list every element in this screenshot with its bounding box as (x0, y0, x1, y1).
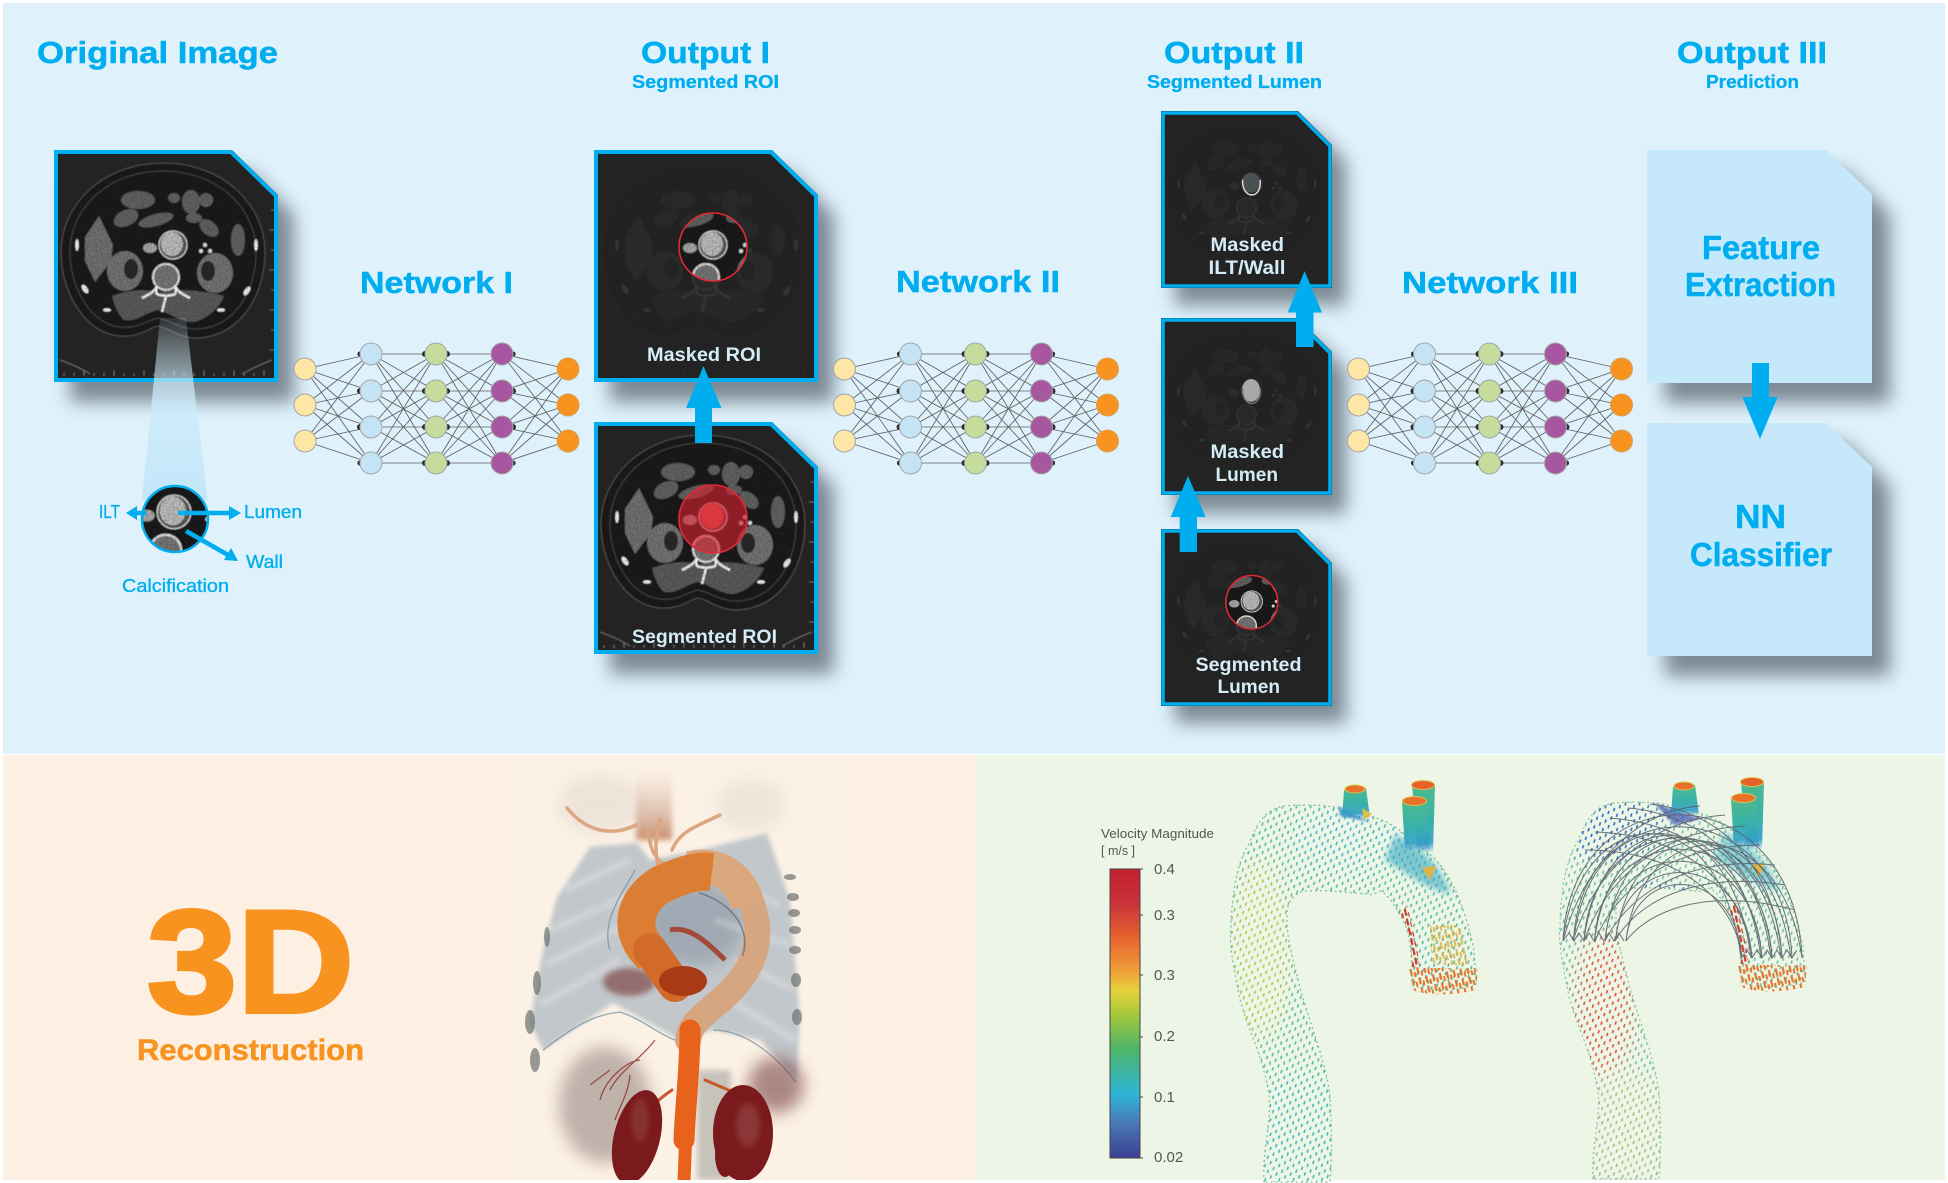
diagram: neural network III (1348, 343, 1632, 474)
card: masked ROI (594, 150, 834, 402)
box: feature extraction (1647, 150, 1890, 403)
heading: Output III: Output III (1677, 35, 1827, 70)
box: feature extraction: Extraction (1685, 266, 1836, 303)
heading: Output I: Segmented ROI (632, 72, 779, 92)
heading: Original Image: Original Image (37, 35, 278, 70)
callout: aorta detail circle with labelled arrows: Wall (246, 552, 283, 572)
heading: Output III (1677, 35, 1827, 92)
card: segmented lumen: Lumen (1218, 677, 1280, 698)
chart: velocity magnitude colour legend: Velocity Magnitude (1101, 826, 1214, 841)
box: NN classifier (1647, 423, 1890, 676)
card: masked lumen: Masked (1210, 442, 1284, 463)
illustration: aorta velocity field with stent mesh (1554, 778, 1807, 1183)
heading: Output I (632, 35, 779, 92)
chart: velocity magnitude colour legend: 0.4 (1154, 861, 1175, 878)
callout: aorta detail circle with labelled arrows (100, 484, 301, 592)
card: segmented lumen (1161, 529, 1346, 723)
box: feature extraction: Feature (1702, 229, 1820, 266)
card: segmented lumen: Segmented (1196, 655, 1302, 676)
chart: velocity magnitude colour legend: [ m/s ] (1101, 843, 1135, 858)
heading: Output III: Prediction (1706, 72, 1799, 92)
panel: pipeline background (3, 3, 1945, 754)
chart: velocity magnitude colour legend (1101, 826, 1214, 1166)
heading: Network III: Network III (1402, 265, 1578, 300)
illustration: aorta velocity field without stent (1230, 780, 1478, 1183)
arrow: masked lumen to masked ILT (1288, 271, 1322, 347)
card: segmented ROI: Segmented ROI (632, 627, 777, 648)
heading: Network I: Network I (360, 265, 513, 300)
chart: velocity magnitude colour legend: 0.3 (1154, 907, 1175, 924)
panel: 3D reconstruction background (3, 755, 975, 1180)
card: original CT image (54, 150, 294, 402)
chart: velocity magnitude colour legend: 0.02 (1154, 1149, 1183, 1166)
box: NN classifier: NN (1735, 498, 1786, 535)
diagram: neural network II (834, 343, 1118, 474)
diagram: neural network I (294, 343, 579, 474)
card: masked lumen: Lumen (1216, 465, 1278, 486)
heading: Network II: Network II (896, 264, 1060, 299)
heading: Output II: Segmented Lumen (1147, 72, 1322, 92)
heading: 3D Reconstruction: Reconstruction (137, 1034, 364, 1067)
panel: velocity simulation background (975, 755, 1945, 1180)
heading: Output II: Output II (1164, 35, 1304, 70)
heading: 3D Reconstruction: 3D (147, 880, 354, 1043)
chart: velocity magnitude colour legend: 0.1 (1154, 1089, 1175, 1106)
illustration: 3D volume rendering of thorax and aorta (510, 760, 858, 1183)
callout: zoom beam from CT to aorta detail (142, 318, 208, 500)
card: masked ILT and wall: ILT/Wall (1208, 258, 1286, 279)
heading: Output I: Output I (641, 35, 770, 70)
callout: aorta detail circle with labelled arrows: Lumen (244, 502, 302, 522)
chart: velocity magnitude colour legend: 0.2 (1154, 1028, 1175, 1045)
card: masked ILT and wall (1161, 111, 1346, 305)
box: NN classifier: Classifier (1690, 536, 1832, 573)
chart: velocity magnitude colour legend: 0.3 (1154, 967, 1175, 984)
arrow: feature extraction to classifier (1742, 363, 1778, 439)
card: masked lumen (1161, 318, 1346, 513)
card: segmented ROI (594, 422, 834, 674)
callout: aorta detail circle with labelled arrows: ILT (99, 502, 120, 522)
heading: Output II (1147, 35, 1322, 92)
card: masked ROI: Masked ROI (647, 345, 761, 366)
arrow: segmented ROI to masked ROI (686, 366, 722, 443)
card: masked ILT and wall: Masked (1210, 235, 1284, 256)
callout: aorta detail circle with labelled arrows: Calcification (122, 576, 229, 596)
arrow: segmented lumen to masked lumen (1171, 476, 1206, 552)
